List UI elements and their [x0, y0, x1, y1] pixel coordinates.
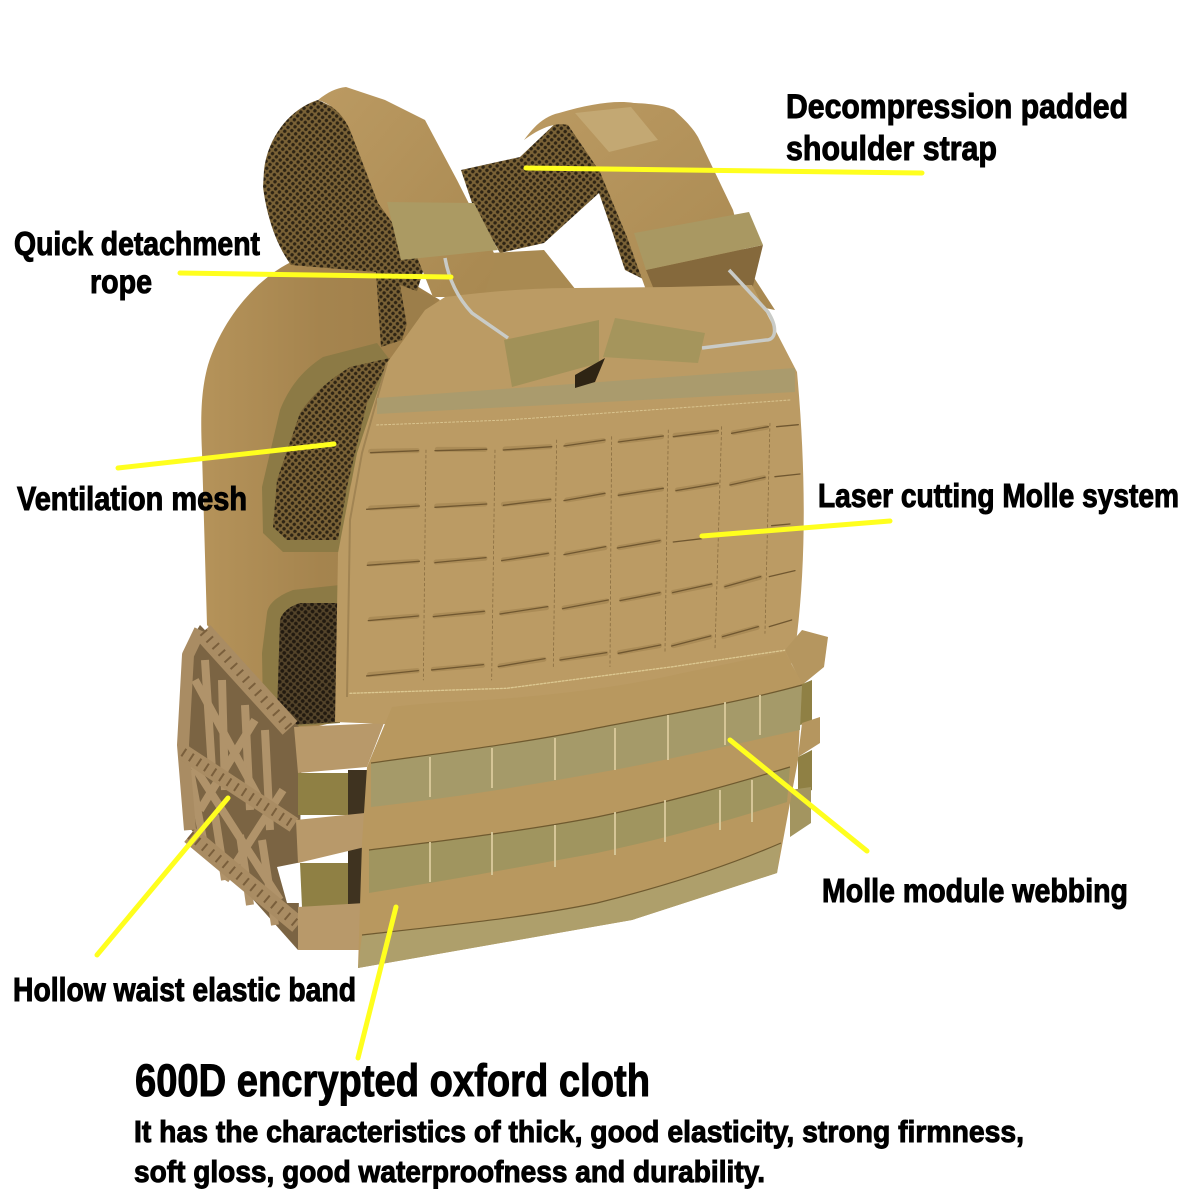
front molle panel [335, 285, 804, 725]
description: soft gloss, good waterproofness and durability. [134, 1154, 765, 1189]
label: quick detachment rope: Quick detachment [14, 225, 260, 262]
velcro patch [575, 107, 658, 152]
tan waist pads [294, 723, 384, 773]
vest illustration [179, 87, 828, 968]
upper mesh panel [262, 343, 390, 552]
top webbing band [377, 368, 795, 414]
leader: oxford cloth [358, 907, 396, 1058]
lower mesh panel [262, 585, 340, 727]
label: decompression strap: Decompression padded [786, 88, 1128, 126]
label: waist band: Hollow waist elastic band [13, 971, 356, 1008]
strap keeper tabs [387, 202, 763, 388]
yellow leader lines [97, 168, 922, 1058]
label: decompression strap: shoulder strap [786, 130, 997, 168]
leader: mesh [118, 444, 334, 468]
padded shoulder strap left with mesh lining [263, 87, 496, 347]
leader: waist band [97, 798, 228, 955]
left seam strip [347, 363, 387, 697]
white gap [277, 862, 302, 903]
heading: oxford cloth: 600D encrypted oxford cloth [135, 1055, 650, 1106]
leader: shoulder strap [526, 168, 922, 173]
middle mesh collar [461, 115, 655, 285]
shoulder yoke [480, 250, 580, 310]
right-side waist tabs [785, 630, 828, 837]
label: quick detachment rope: rope [90, 263, 152, 300]
webbing row two [369, 767, 790, 893]
lower molle webbing panel [358, 630, 828, 968]
leader: webbing [730, 740, 867, 851]
label: molle webbing: Molle module webbing [822, 872, 1128, 909]
label: ventilation mesh: Ventilation mesh [17, 480, 247, 517]
webbing row one [371, 685, 802, 807]
label: quick detachment rope [14, 225, 260, 300]
description: It has the characteristics of thick, good elasticity, strong firmness, [134, 1114, 1024, 1149]
bottom flap [358, 843, 781, 968]
padded shoulder strap right [524, 102, 775, 310]
stitch lines and laser-cut slots [350, 400, 800, 693]
leader: molle system [702, 521, 890, 536]
leader: rope [180, 273, 451, 277]
hollow waist elastic frame [179, 625, 384, 950]
back plate with ventilation mesh [201, 262, 440, 732]
olive webbing straps [298, 773, 350, 815]
quick detachment rope [445, 258, 775, 348]
description [134, 1114, 1024, 1189]
label: decompression strap [786, 88, 1128, 168]
